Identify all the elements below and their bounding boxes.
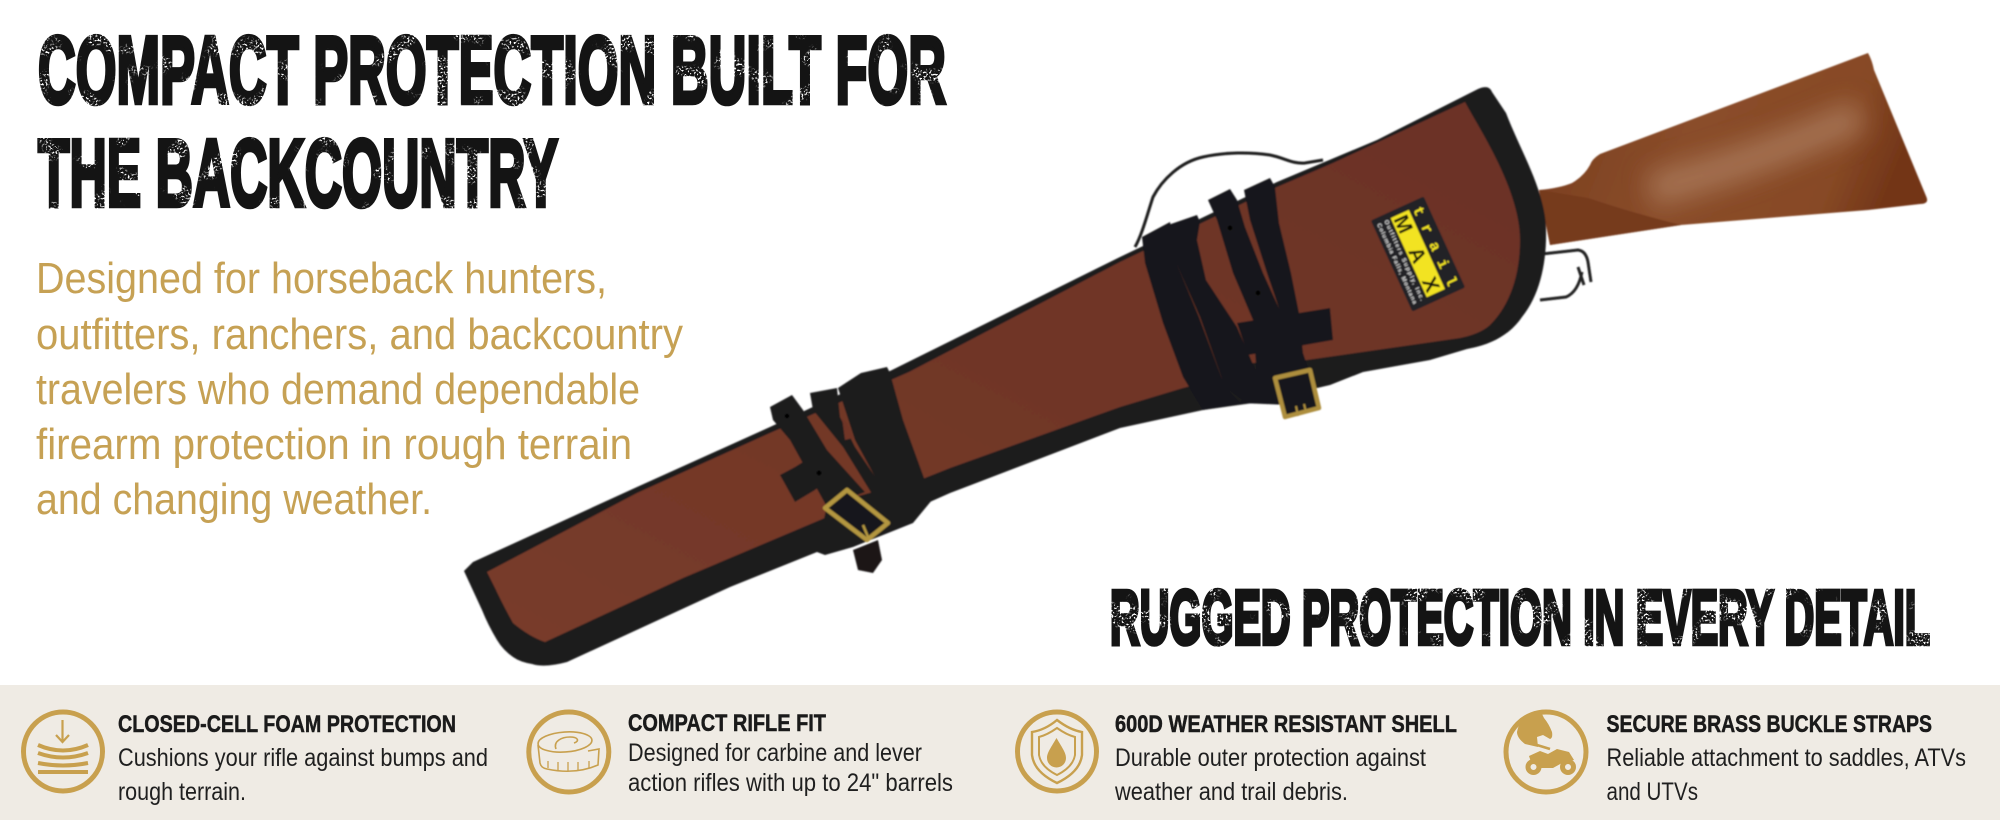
brand label: Outfitters Supply, Inc. — [1382, 219, 1425, 302]
feature description: and UTVs — [1606, 778, 1698, 806]
upper buckle — [1275, 370, 1319, 417]
feature: rifle fit — [529, 710, 953, 797]
icon: horse and ATV — [1506, 712, 1586, 792]
intro paragraph — [36, 254, 683, 524]
intro paragraph: firearm protection in rough terrain — [36, 420, 632, 469]
product photo: rifle in scabbard — [464, 53, 1927, 666]
icon: measuring tape — [529, 712, 609, 792]
feature: foam protection — [24, 711, 488, 806]
feature description: Designed for carbine and lever — [628, 739, 922, 767]
wire hook — [1540, 250, 1591, 300]
feature description: Cushions your rifle against bumps and — [118, 744, 488, 772]
title: THE BACKCOUNTRY — [38, 120, 558, 227]
feature description — [1606, 744, 1966, 806]
icon: shield with drop — [1018, 712, 1096, 791]
brand label: Columbia Falls, Montana — [1375, 223, 1417, 306]
lower buckle — [825, 490, 888, 573]
carry cord — [1135, 153, 1323, 247]
rifle stock — [1539, 53, 1927, 245]
feature: weather shell — [1018, 711, 1457, 806]
feature band — [0, 685, 2000, 820]
brand label — [1371, 196, 1465, 312]
title: COMPACT PROTECTION BUILT FOR — [38, 17, 946, 124]
intro paragraph: outfitters, ranchers, and backcountry — [36, 310, 683, 359]
upper straps — [1142, 178, 1333, 410]
brand label: trail — [1408, 204, 1459, 289]
feature description: rough terrain. — [118, 778, 246, 806]
brand label: MAX — [1389, 212, 1444, 296]
feature heading: CLOSED-CELL FOAM PROTECTION — [118, 711, 456, 738]
intro paragraph: travelers who demand dependable — [36, 365, 640, 414]
feature description: action rifles with up to 24" barrels — [628, 769, 953, 797]
feature description — [628, 739, 953, 797]
intro paragraph: Designed for horseback hunters, — [36, 254, 607, 303]
feature heading: 600D WEATHER RESISTANT SHELL — [1115, 711, 1457, 738]
title — [38, 17, 946, 227]
feature: buckle straps — [1506, 711, 1966, 806]
scabbard outer binding — [464, 87, 1546, 666]
lower straps — [770, 367, 932, 555]
intro paragraph: and changing weather. — [36, 475, 432, 524]
feature description — [1114, 744, 1426, 806]
feature description: Durable outer protection against — [1115, 744, 1426, 772]
icon: foam layers — [24, 712, 102, 791]
feature heading: COMPACT RIFLE FIT — [628, 710, 826, 737]
feature description — [118, 744, 488, 806]
scabbard brown canvas — [487, 102, 1520, 642]
feature description: weather and trail debris. — [1114, 778, 1348, 806]
